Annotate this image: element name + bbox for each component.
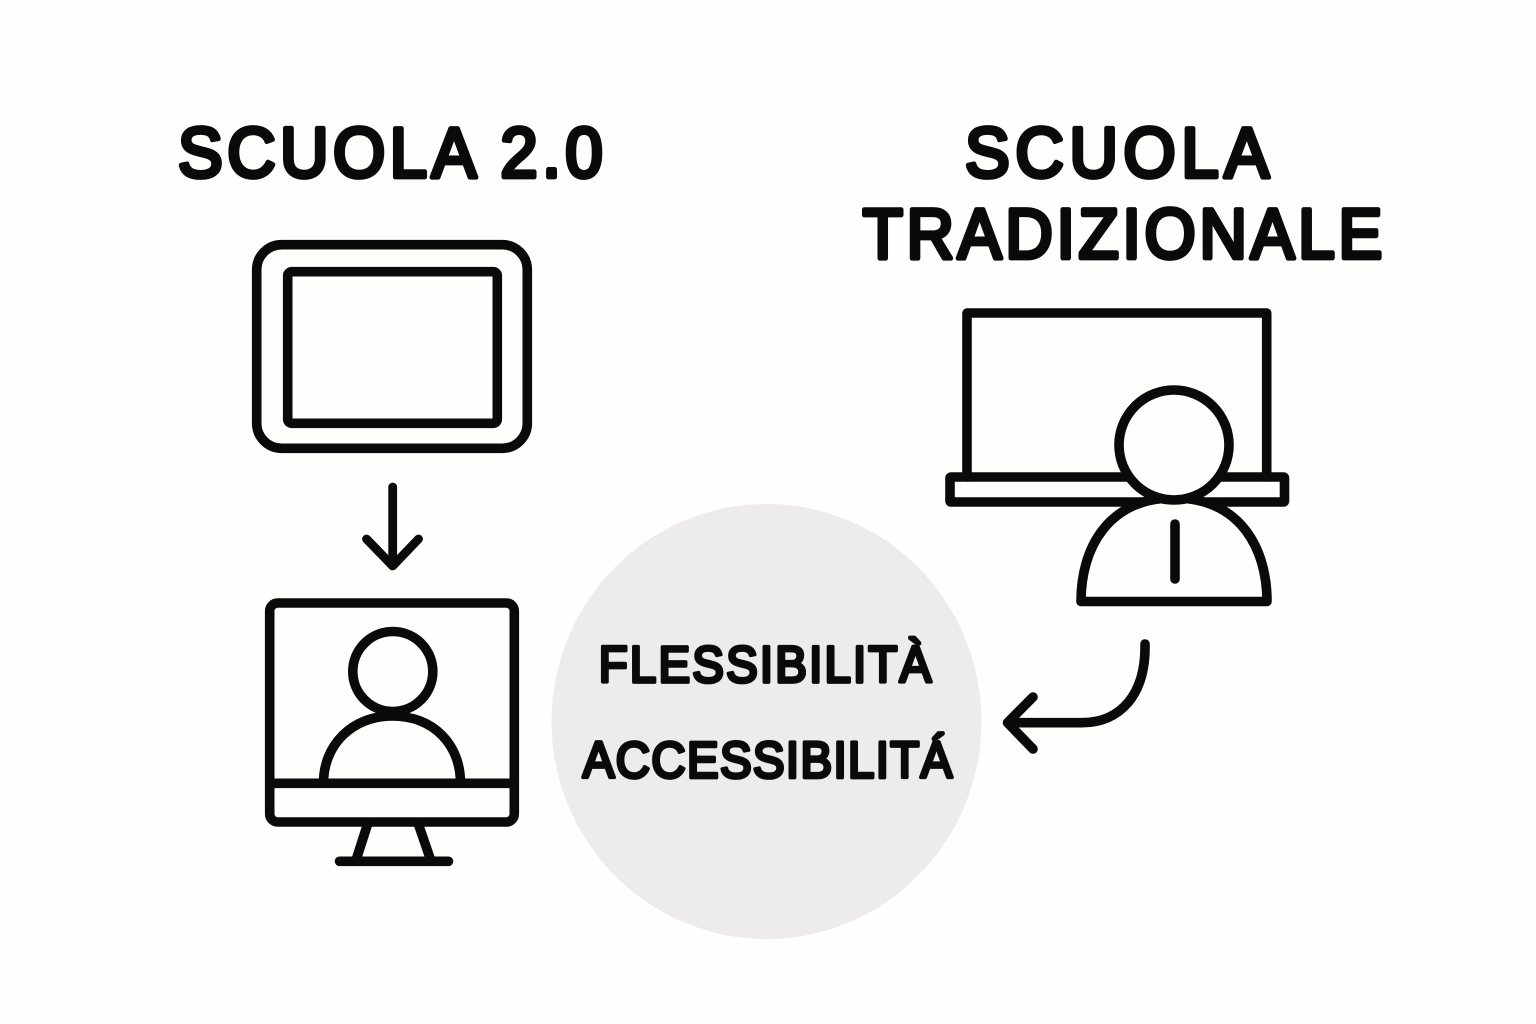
heading: Scuola tradizionale: TRADIZIONALE	[863, 195, 1382, 274]
arrow: traditional school to benefits	[1008, 644, 1145, 749]
heading: Scuola tradizionale	[863, 113, 1382, 274]
icon: teacher at blackboard	[950, 313, 1284, 602]
heading: Scuola 2.0: SCUOLA 2.0	[178, 113, 603, 192]
icon: tablet	[257, 245, 527, 448]
label: accessibilità: ACCESSIBILITÁ	[583, 732, 952, 789]
heading: Scuola tradizionale: SCUOLA	[965, 113, 1269, 192]
label: flessibilità: FLESSIBILITÀ	[599, 636, 931, 693]
icon: computer with student	[270, 603, 514, 861]
arrow: tablet to computer	[366, 487, 418, 566]
circle: benefits	[552, 504, 982, 939]
